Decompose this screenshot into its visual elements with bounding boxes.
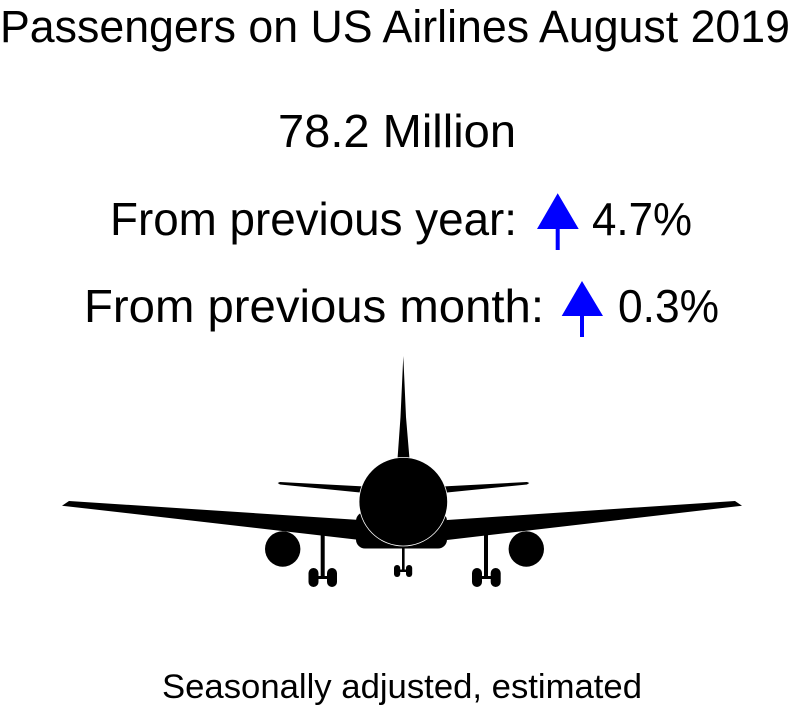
fuselage	[359, 457, 448, 546]
title: Passengers on US Airlines August 2019	[0, 1, 790, 52]
footnote: Seasonally adjusted, estimated	[162, 668, 642, 706]
icon: up arrow year	[537, 193, 579, 250]
landing gear right	[472, 535, 501, 587]
label: from previous year: From previous year:	[110, 193, 517, 245]
headline figure: 78.2 Million	[278, 105, 516, 157]
label: from previous month: From previous month:	[84, 280, 544, 332]
engines	[265, 531, 300, 567]
horizontal stabilizers	[278, 482, 529, 493]
icon: airplane front view	[62, 356, 742, 587]
value: 4.7%: 4.7%	[592, 193, 692, 245]
month-over-month change	[84, 280, 719, 337]
belly fairing	[356, 512, 447, 548]
nose gear	[394, 546, 412, 577]
icon: up arrow month	[562, 281, 603, 337]
wings	[62, 501, 742, 540]
year-over-year change	[110, 193, 692, 250]
value: 0.3%: 0.3%	[618, 280, 719, 332]
tail fin	[398, 356, 410, 459]
landing gear left	[308, 535, 337, 587]
